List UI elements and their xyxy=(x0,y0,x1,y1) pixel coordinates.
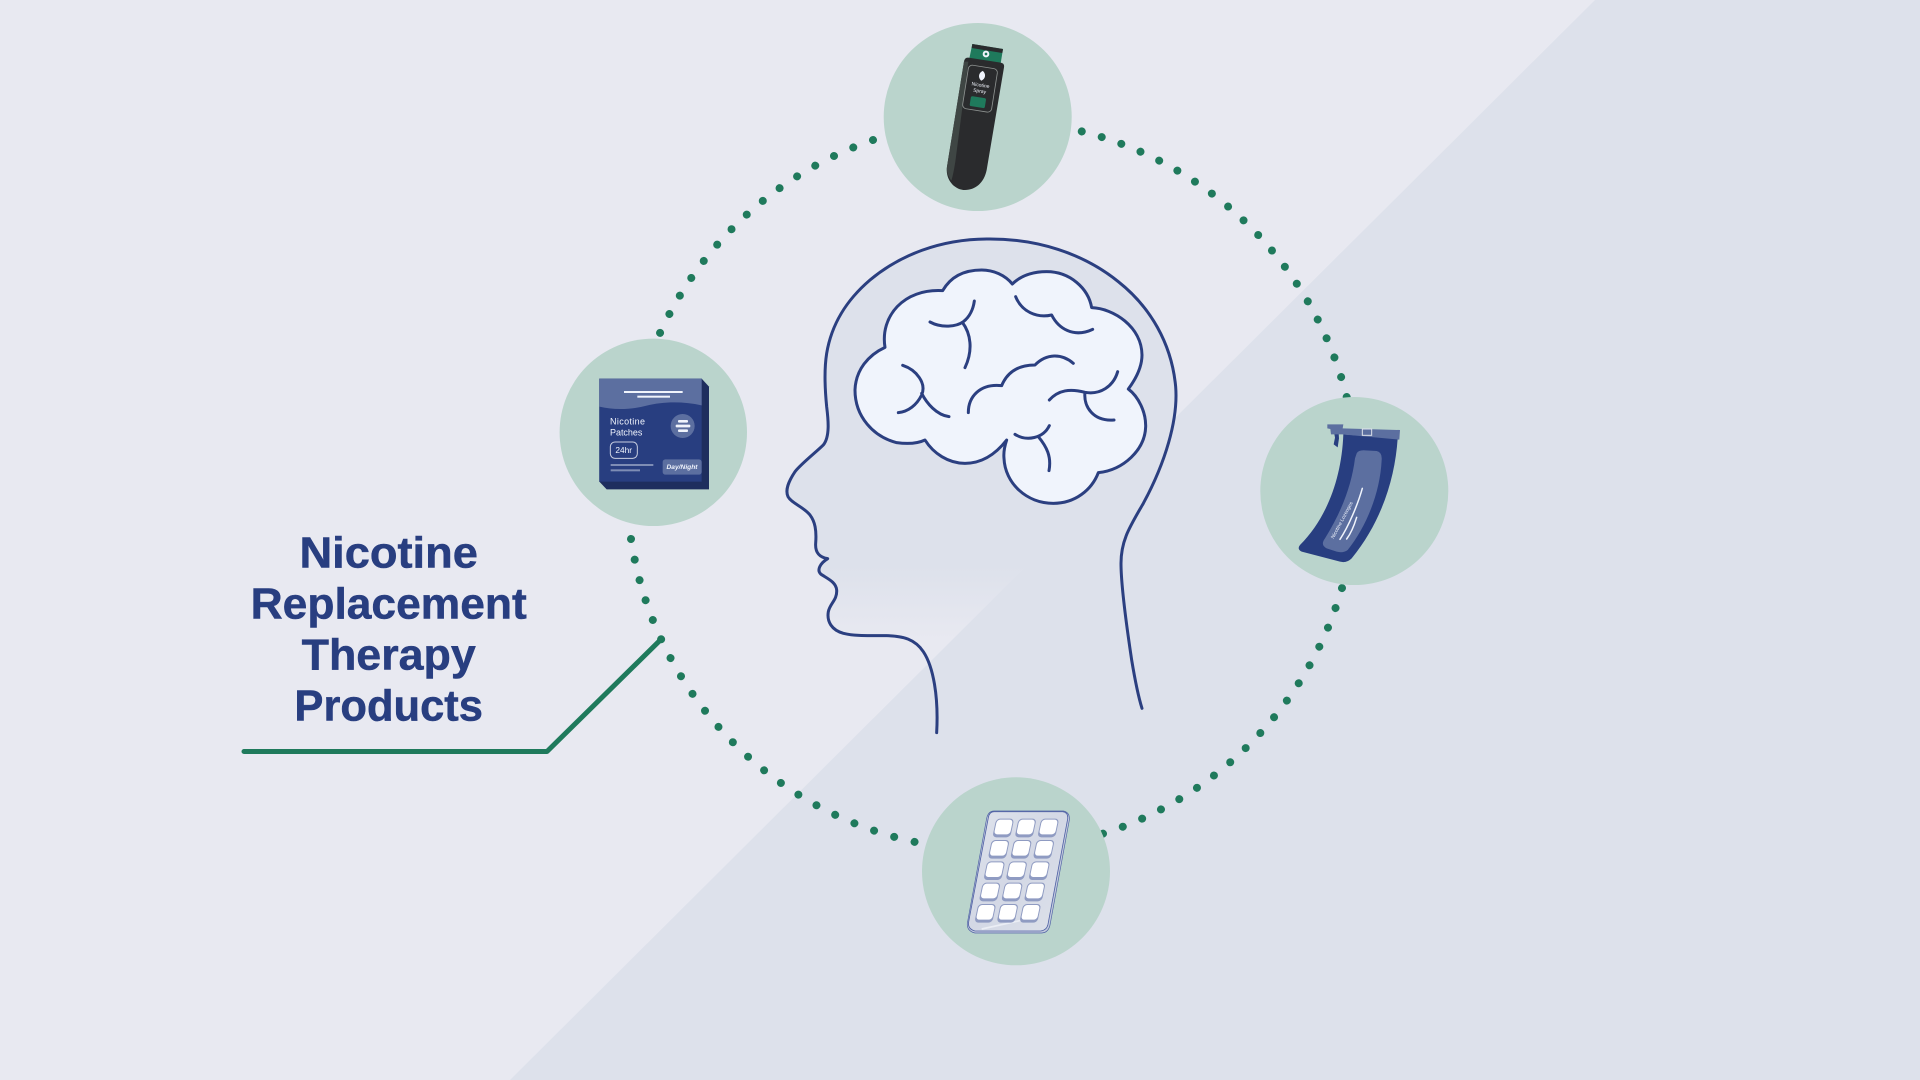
icon: nicotine patches box: 24hr xyxy=(615,445,632,455)
title: Nicotine xyxy=(300,529,478,577)
icon: nicotine patches box: Nicotine xyxy=(610,416,645,426)
head and brain illustration xyxy=(787,239,1176,733)
brain xyxy=(855,270,1146,503)
product circle: nicotine lozenges xyxy=(1260,397,1448,585)
dotted ring xyxy=(631,131,1347,842)
title: Therapy xyxy=(302,631,476,679)
product circle: nicotine patches xyxy=(560,339,747,526)
icon: nicotine lozenge pouch xyxy=(1299,424,1400,562)
title xyxy=(251,529,527,731)
icon: nicotine spray: Spray xyxy=(973,88,987,96)
icon: nicotine spray xyxy=(947,44,1004,190)
icon: nicotine patches box: Day/Night xyxy=(666,464,698,471)
product circle: nicotine gum xyxy=(922,777,1110,965)
icon: nicotine patches box: Patches xyxy=(610,427,643,437)
icon: nicotine lozenge pouch: Nicotine Lozenges xyxy=(1330,500,1355,540)
icon: nicotine patches box xyxy=(599,379,709,489)
title: Products xyxy=(294,683,483,731)
head outline xyxy=(787,239,1176,733)
leader line xyxy=(244,640,661,752)
icon: nicotine spray: Nicotine xyxy=(971,81,990,90)
title: Replacement xyxy=(251,580,527,628)
background diagonal panel xyxy=(510,0,1920,1080)
product circle: nicotine spray xyxy=(884,23,1072,211)
icon: gum blister pack xyxy=(967,811,1069,933)
